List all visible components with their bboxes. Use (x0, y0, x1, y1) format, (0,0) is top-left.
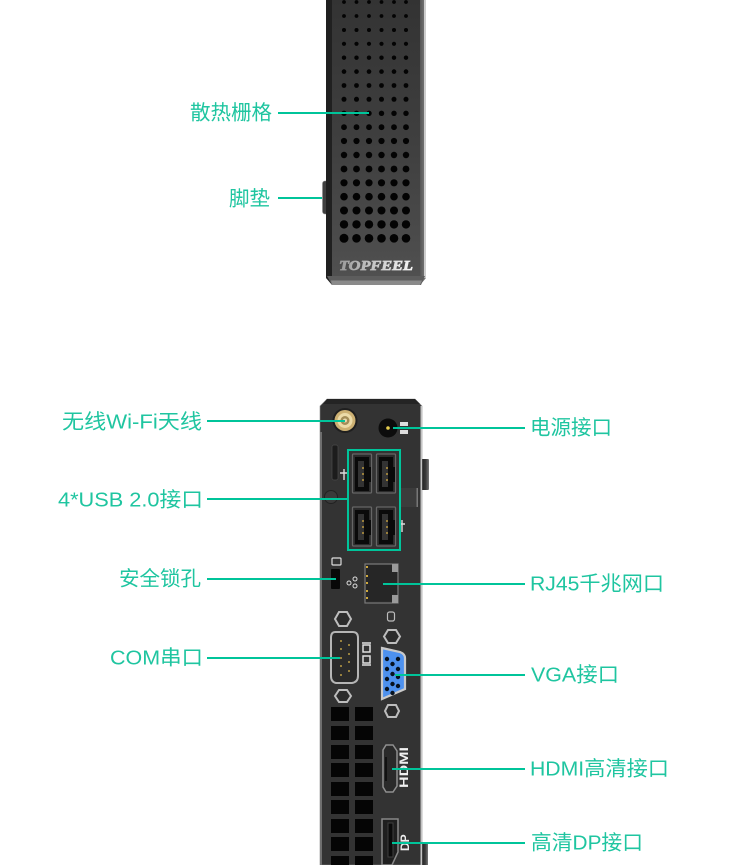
callout: usb (58, 450, 400, 550)
callout: vga: VGA接口 (531, 664, 619, 686)
antenna connector (332, 408, 358, 433)
security lock slot (331, 569, 340, 589)
dp text: DP (398, 834, 412, 851)
usb port top right (376, 454, 396, 493)
hex standoff (385, 705, 399, 717)
power jack (378, 418, 408, 438)
callout: security lock: 安全锁孔 (119, 568, 201, 590)
rj45 port (365, 564, 398, 603)
hex standoff (384, 630, 400, 643)
device: top side view (322, 0, 426, 285)
usb bracket (400, 488, 418, 507)
latch slot (332, 445, 338, 480)
lock icon (332, 558, 341, 565)
network icon (347, 577, 357, 588)
callout: displayport: 高清DP接口 (531, 832, 643, 854)
callout: foot pad (229, 188, 322, 210)
callout: usb: 4*USB 2.0接口 (58, 488, 203, 512)
display icon (388, 612, 394, 621)
hex standoff (335, 612, 351, 626)
usb port bottom left (352, 507, 372, 546)
dp port (382, 819, 398, 865)
hdmi text: HDMI (397, 747, 411, 788)
vent grid (331, 707, 373, 865)
usb icon (399, 520, 405, 532)
device: rear I/O panel (320, 399, 429, 865)
chassis face (332, 0, 420, 278)
rubber foot (322, 181, 328, 214)
com port (331, 632, 358, 683)
vga port (382, 648, 405, 699)
usb port bottom right (376, 507, 396, 546)
vent grille dots (340, 0, 410, 243)
right side protrusions (421, 459, 429, 490)
callout: wifi antenna: 无线Wi-Fi天线 (62, 410, 202, 434)
callout: foot pad: 脚垫 (229, 188, 270, 210)
callout: rj45: RJ45千兆网口 (530, 572, 664, 596)
callout: com port: COM串口 (110, 646, 203, 670)
logo: TOPFEEL: TOPFEEL (339, 259, 413, 274)
hdmi port (383, 745, 397, 792)
callout: hdmi: HDMI高清接口 (530, 758, 669, 780)
chassis right edge (420, 0, 426, 285)
round screw (324, 490, 338, 504)
usb icon (340, 469, 348, 480)
chassis bottom edge (327, 276, 425, 285)
chassis left edge (326, 0, 333, 285)
hex standoff (335, 690, 351, 702)
com icon (362, 643, 371, 665)
usb port top left (352, 454, 372, 493)
callout: vent grille: 散热栅格 (190, 102, 272, 124)
chassis (320, 399, 422, 865)
callout: power: 电源接口 (530, 416, 612, 440)
